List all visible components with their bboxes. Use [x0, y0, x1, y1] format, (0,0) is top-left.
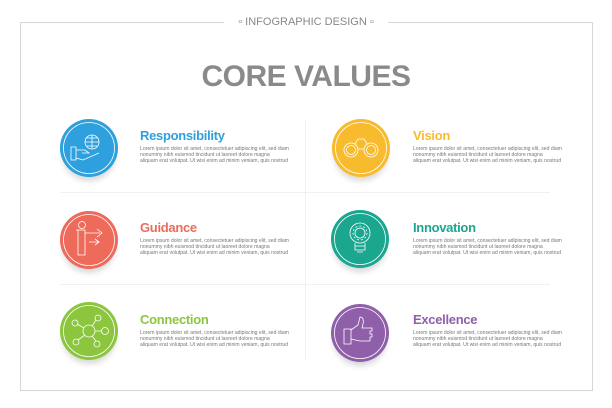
icon: guidance	[60, 211, 118, 269]
item: vision: Vision	[413, 128, 450, 143]
item: responsibility	[140, 128, 289, 164]
title: CORE VALUES	[202, 60, 410, 93]
item: excellence: Excellence	[413, 312, 477, 327]
item: excellence	[413, 312, 562, 348]
item: connection: nonummy nibh euismod tincidunt ut laoreet dolore magna	[140, 336, 270, 342]
item: innovation: Innovation	[413, 220, 476, 235]
item: responsibility: Lorem ipsum dolor sit amet, consectetuer adipiscing elit, sed diam	[140, 146, 289, 152]
item: excellence: aliquam erat volutpat. Ut wisi enim ad minim veniam, quis nostrud	[413, 342, 561, 348]
item: excellence: Lorem ipsum dolor sit amet, consectetuer adipiscing elit, sed diam	[413, 330, 562, 336]
item: guidance: nonummy nibh euismod tincidunt ut laoreet dolore magna	[140, 244, 270, 250]
item: vision: nonummy nibh euismod tincidunt ut laoreet dolore magna	[413, 152, 543, 158]
item: innovation: Lorem ipsum dolor sit amet, consectetuer adipiscing elit, sed diam	[413, 238, 562, 244]
item: vision	[413, 128, 562, 164]
item: responsibility: Responsibility	[140, 128, 225, 143]
item: guidance: Guidance	[140, 220, 197, 235]
item: innovation: aliquam erat volutpat. Ut wisi enim ad minim veniam, quis nostrud	[413, 250, 561, 256]
icon: excellence	[331, 304, 389, 362]
item: vision: Lorem ipsum dolor sit amet, consectetuer adipiscing elit, sed diam	[413, 146, 562, 152]
icon: vision	[332, 119, 390, 177]
item: connection: aliquam erat volutpat. Ut wisi enim ad minim veniam, quis nostrud	[140, 342, 288, 348]
item: connection: Connection	[140, 312, 208, 327]
item: responsibility: aliquam erat volutpat. Ut wisi enim ad minim veniam, quis nostrud	[140, 158, 288, 164]
item: connection: Lorem ipsum dolor sit amet, consectetuer adipiscing elit, sed diam	[140, 330, 289, 336]
icon: connection	[60, 302, 118, 360]
item: connection	[140, 312, 289, 348]
item: guidance	[140, 220, 289, 256]
icon: innovation	[331, 210, 389, 268]
item: innovation	[413, 220, 562, 256]
dividers	[305, 120, 306, 360]
item: guidance: aliquam erat volutpat. Ut wisi enim ad minim veniam, quis nostrud	[140, 250, 288, 256]
header label: ▫ INFOGRAPHIC DESIGN ▫	[238, 16, 374, 28]
item: responsibility: nonummy nibh euismod tincidunt ut laoreet dolore magna	[140, 152, 270, 158]
item: innovation: nonummy nibh euismod tincidunt ut laoreet dolore magna	[413, 244, 543, 250]
item: vision: aliquam erat volutpat. Ut wisi enim ad minim veniam, quis nostrud	[413, 158, 561, 164]
icon: responsibility	[60, 119, 118, 177]
item: guidance: Lorem ipsum dolor sit amet, consectetuer adipiscing elit, sed diam	[140, 238, 289, 244]
item: excellence: nonummy nibh euismod tincidunt ut laoreet dolore magna	[413, 336, 543, 342]
